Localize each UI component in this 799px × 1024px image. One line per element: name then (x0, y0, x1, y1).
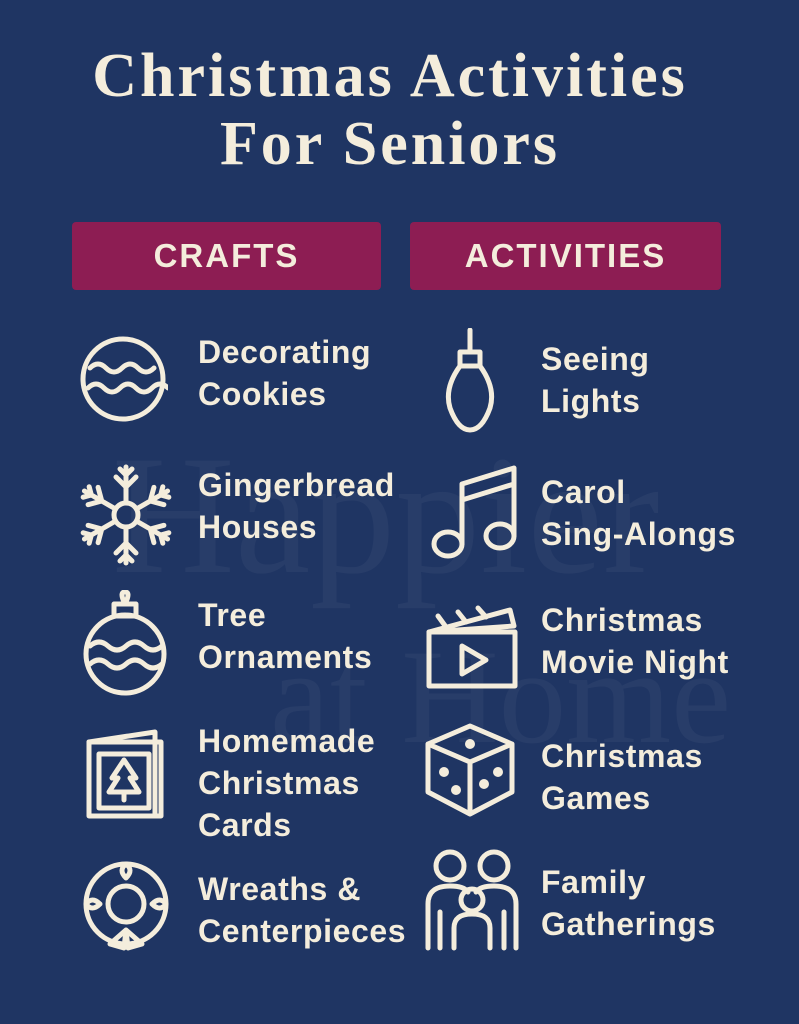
header: activities: ACTIVITIES (465, 237, 666, 274)
text: carol sing-alongs: Carol (541, 474, 626, 510)
watermark (112, 421, 731, 772)
text: wreaths: Wreaths & (198, 871, 361, 907)
icon: clapperboard (426, 606, 518, 688)
text: family gatherings (541, 864, 716, 942)
icon: die (426, 724, 514, 816)
icon: snowflake (80, 464, 172, 566)
text: seeing lights: Seeing (541, 341, 650, 377)
header: activities (410, 222, 721, 290)
icon: wreath (84, 862, 168, 950)
text: christmas movie night: Movie Night (541, 644, 729, 680)
text: christmas games: Games (541, 780, 651, 816)
text: christmas games (541, 738, 703, 816)
icon: family (426, 850, 518, 950)
text: decorating cookies: Decorating (198, 334, 371, 370)
watermark: at Home (270, 623, 731, 772)
text: seeing lights (541, 341, 650, 419)
text: tree ornaments: Tree (198, 597, 266, 633)
icon: card (86, 730, 164, 818)
text: seeing lights: Lights (541, 383, 641, 419)
text: family gatherings: Gatherings (541, 906, 716, 942)
icon: ornament (84, 590, 166, 696)
title: Christmas Activities (92, 42, 688, 110)
text: carol sing-alongs: Sing-Alongs (541, 516, 736, 552)
icon: music note (432, 466, 516, 558)
text: family gatherings: Family (541, 864, 646, 900)
text: christmas movie night (541, 602, 729, 680)
icon: cookie (80, 336, 168, 422)
title (92, 42, 688, 178)
text: homemade christmas cards: Homemade (198, 723, 375, 759)
text: carol sing-alongs (541, 474, 736, 552)
header: crafts (72, 222, 381, 290)
text: tree ornaments (198, 597, 372, 675)
text: homemade christmas cards: Christmas (198, 765, 360, 801)
header: crafts: CRAFTS (154, 237, 299, 274)
text: decorating cookies: Cookies (198, 376, 327, 412)
text: christmas games: Christmas (541, 738, 703, 774)
text: homemade christmas cards: Cards (198, 807, 292, 843)
text: decorating cookies (198, 334, 371, 412)
title: For Seniors (220, 110, 560, 178)
text: wreaths: Centerpieces (198, 913, 406, 949)
text: wreaths (198, 871, 406, 949)
text: tree ornaments: Ornaments (198, 639, 372, 675)
watermark: Happier (112, 421, 660, 609)
text: gingerbread houses: Gingerbread (198, 467, 395, 503)
text: gingerbread houses (198, 467, 395, 545)
text: homemade christmas cards (198, 723, 375, 843)
text: gingerbread houses: Houses (198, 509, 317, 545)
icon: light bulb (446, 328, 494, 432)
text: christmas movie night: Christmas (541, 602, 703, 638)
